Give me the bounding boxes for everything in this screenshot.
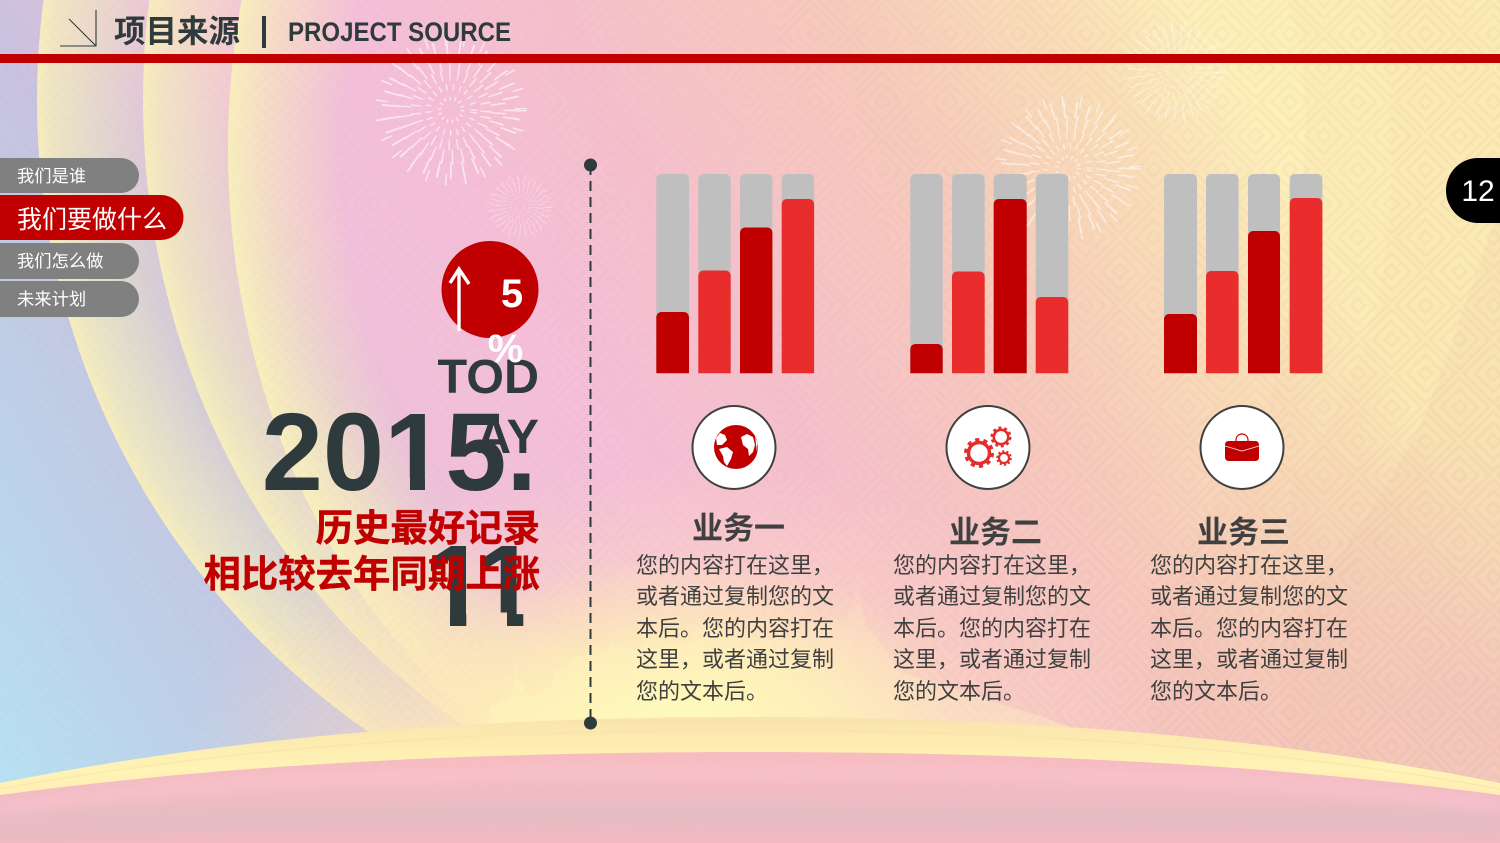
nav item: 我们要做什么 (active): 我们要做什么	[17, 206, 167, 234]
big date: TODAY 2015.11	[266, 360, 538, 626]
icon: gears	[946, 406, 1030, 489]
bottom ribbon arcs	[0, 717, 1500, 843]
dashed divider	[584, 158, 597, 730]
body text: 业务一: 您的内容打在这里，	[636, 553, 834, 578]
firework: top centre	[381, 40, 521, 180]
page number	[1446, 158, 1500, 223]
today badge: up arrow and percent	[442, 241, 538, 371]
firework: small right	[1127, 24, 1223, 120]
body text: 业务三: 或者通过复制您的文	[1150, 584, 1348, 609]
body text: 业务一: 或者通过复制您的文	[636, 584, 834, 609]
body text: 业务一: 您的文本后。	[636, 679, 768, 704]
big date: TODAY 2015.11: TOD	[438, 350, 539, 404]
red headline: 相比较去年同期上涨	[203, 553, 540, 595]
column: 业务二	[893, 515, 1091, 704]
title	[114, 13, 511, 49]
body text: 业务三: 本后。您的内容打在	[1150, 616, 1348, 641]
nav item: 我们怎么做: 我们怎么做	[17, 251, 103, 271]
big date: TODAY 2015.11: AY	[476, 410, 539, 464]
nav item: 我们是谁	[0, 158, 139, 193]
body text: 业务二: 本后。您的内容打在	[893, 616, 1091, 641]
nav item: 未来计划	[0, 281, 139, 317]
red headline: 历史最好记录	[316, 507, 540, 549]
firework: small centre	[490, 177, 550, 237]
page number: 12	[1461, 175, 1495, 208]
nav item: 我们是谁: 我们是谁	[17, 166, 86, 186]
column: 业务二: 业务二	[949, 515, 1042, 550]
body text: 业务一: 这里，或者通过复制	[636, 647, 834, 672]
today badge: up arrow and percent: %	[488, 327, 523, 371]
icon: globe	[692, 406, 776, 489]
nav item: 未来计划: 未来计划	[17, 289, 86, 309]
body text: 业务二	[893, 553, 1091, 704]
column: 业务一: 业务一	[692, 511, 785, 546]
body text: 业务二: 或者通过复制您的文	[893, 584, 1091, 609]
side navigation	[0, 158, 184, 317]
title: 项目来源	[114, 13, 240, 49]
body text: 业务三: 您的文本后。	[1150, 679, 1282, 704]
body text: 业务一: 本后。您的内容打在	[636, 616, 834, 641]
red headline	[203, 507, 540, 595]
header corner icon	[60, 10, 96, 46]
body text: 业务三: 这里，或者通过复制	[1150, 647, 1348, 672]
title: PROJECT SOURCE	[288, 17, 511, 47]
bar chart: 业务二	[910, 174, 1068, 373]
body text: 业务二: 您的内容打在这里，	[893, 553, 1091, 578]
nav item: 我们怎么做	[0, 243, 139, 279]
body text: 业务二: 您的文本后。	[893, 679, 1025, 704]
bar chart: 业务一	[656, 174, 814, 373]
big date: TODAY 2015.11: 2015.	[262, 391, 537, 514]
firework: right	[1001, 101, 1135, 235]
body text: 业务二: 这里，或者通过复制	[893, 647, 1091, 672]
column: 业务三	[1150, 515, 1348, 704]
bar chart: 业务三	[1164, 174, 1322, 373]
column: 业务三: 业务三	[1197, 515, 1290, 550]
skyline silhouette	[488, 560, 1090, 735]
body text: 业务一	[636, 553, 834, 704]
nav item: 我们要做什么 (active)	[0, 195, 184, 240]
header bar	[0, 54, 1500, 63]
body text: 业务三: 您的内容打在这里，	[1150, 553, 1348, 578]
icon: briefcase	[1200, 406, 1284, 489]
column: 业务一	[636, 511, 834, 704]
body text: 业务三	[1150, 553, 1348, 704]
today badge: up arrow and percent: 5	[501, 272, 523, 316]
big date: TODAY 2015.11: 11	[423, 521, 536, 651]
